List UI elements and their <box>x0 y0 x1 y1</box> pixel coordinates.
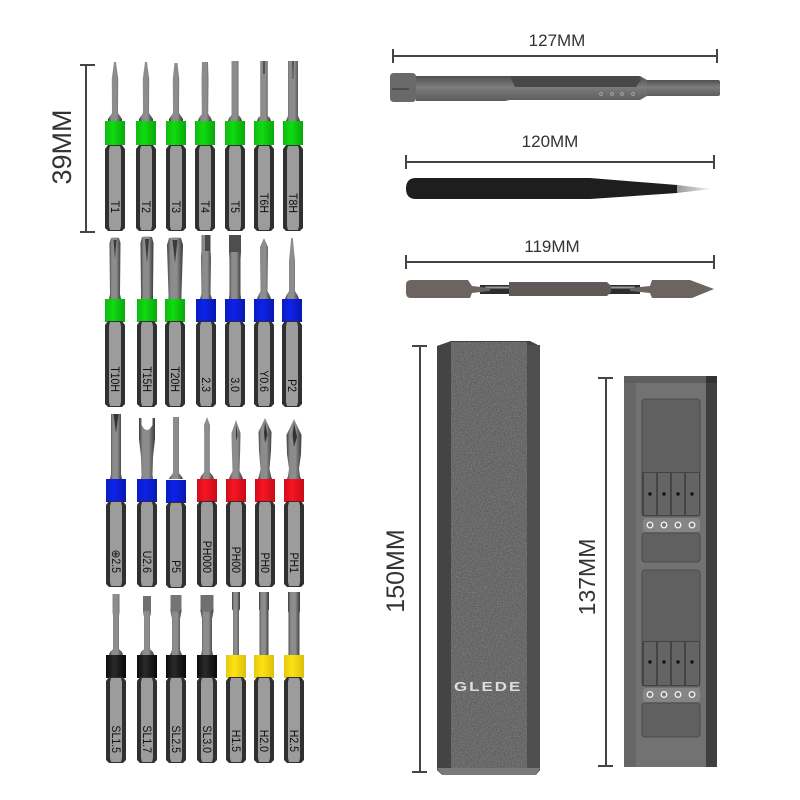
bit PH000 <box>197 417 217 587</box>
bit T10H: T10H <box>108 366 121 392</box>
150MM dimension <box>382 346 427 772</box>
bit H2.5: H2.5 <box>287 730 300 752</box>
bit T2: T2 <box>139 201 152 213</box>
bit P5: P5 <box>169 560 182 573</box>
bit P2: P2 <box>285 379 298 392</box>
bit SL2.5 <box>166 595 186 763</box>
bit PH000: PH000 <box>200 541 213 573</box>
bit PH00: PH00 <box>229 547 242 573</box>
bit T20H: T20H <box>168 366 181 392</box>
label: 39MM: 39MM <box>47 109 77 185</box>
bit T15H <box>137 236 157 407</box>
bit P5 <box>166 417 186 588</box>
bit T6H <box>254 61 274 231</box>
label: 150MM: 150MM <box>382 529 410 613</box>
bit U2.6: U2.6 <box>140 551 153 573</box>
bit T5: T5 <box>228 201 241 213</box>
plate: upper screws <box>643 518 700 532</box>
bit T3: T3 <box>169 201 182 213</box>
bit T15H: T15H <box>140 366 153 392</box>
bit 2.3: 2.3 <box>199 377 212 392</box>
137MM dimension <box>574 378 613 766</box>
bit SL3.0 <box>197 595 217 763</box>
127MM dimension <box>393 31 717 63</box>
compartment: upper bit tray <box>642 399 700 516</box>
compartment: lower small tray <box>642 703 700 737</box>
bit H2.0: H2.0 <box>257 730 270 752</box>
120MM dimension <box>406 132 714 169</box>
bit PH0 <box>255 418 275 587</box>
bit cross 2.5: ⊕2.5 <box>109 549 122 573</box>
39MM dimension <box>47 65 95 232</box>
bit SL3.0: SL3.0 <box>200 725 213 753</box>
bit SL1.7 <box>137 596 157 763</box>
bit SL1.5: SL1.5 <box>109 725 122 753</box>
bit T4 <box>195 62 215 231</box>
bit SL2.5: SL2.5 <box>169 725 182 753</box>
bit T2 <box>136 62 156 231</box>
bit P2 <box>282 238 302 407</box>
bit T4: T4 <box>198 201 211 213</box>
bit PH1 <box>284 419 304 587</box>
bit 3.0: 3.0 <box>228 377 241 392</box>
open case <box>624 376 717 767</box>
label: 127MM: 127MM <box>529 31 585 50</box>
bit U2.6 <box>137 418 157 587</box>
bit PH00 <box>226 420 246 587</box>
plate: lower screws <box>643 688 700 702</box>
bit cross 2.5 <box>106 414 126 587</box>
bit SL1.7: SL1.7 <box>140 725 153 753</box>
logo: GLEDE: GLEDE <box>454 680 520 694</box>
label: 119MM: 119MM <box>524 237 580 256</box>
119MM dimension <box>406 237 714 269</box>
bit H1.5 <box>226 592 246 763</box>
bit T3 <box>166 63 186 231</box>
bit PH0: PH0 <box>258 552 271 573</box>
screwdriver handle <box>390 73 720 102</box>
bit Y0.6: Y0.6 <box>257 370 270 392</box>
bit T8H: T8H <box>286 193 299 213</box>
bit T1: T1 <box>108 201 121 213</box>
bit T8H <box>283 61 303 231</box>
bit T10H <box>105 238 125 407</box>
bit H2.5 <box>284 592 304 763</box>
bit Y0.6 <box>254 238 274 407</box>
closed case <box>437 341 540 775</box>
bit H1.5: H1.5 <box>229 730 242 752</box>
bit SL1.5 <box>106 594 126 763</box>
bit 3.0 <box>225 235 245 407</box>
bit T6H: T6H <box>257 193 270 213</box>
bit T20H <box>165 238 185 407</box>
bit H2.0 <box>254 592 274 763</box>
bit 2.3 <box>196 235 216 407</box>
bit T5 <box>225 61 245 231</box>
tweezers <box>406 178 711 199</box>
compartment: upper small tray <box>642 533 700 562</box>
spudger <box>406 280 714 298</box>
bit PH1: PH1 <box>287 552 300 573</box>
compartment: lower bit tray <box>642 570 700 686</box>
label: 137MM: 137MM <box>574 539 600 615</box>
bit T1 <box>105 62 125 231</box>
label: 120MM: 120MM <box>522 132 578 151</box>
